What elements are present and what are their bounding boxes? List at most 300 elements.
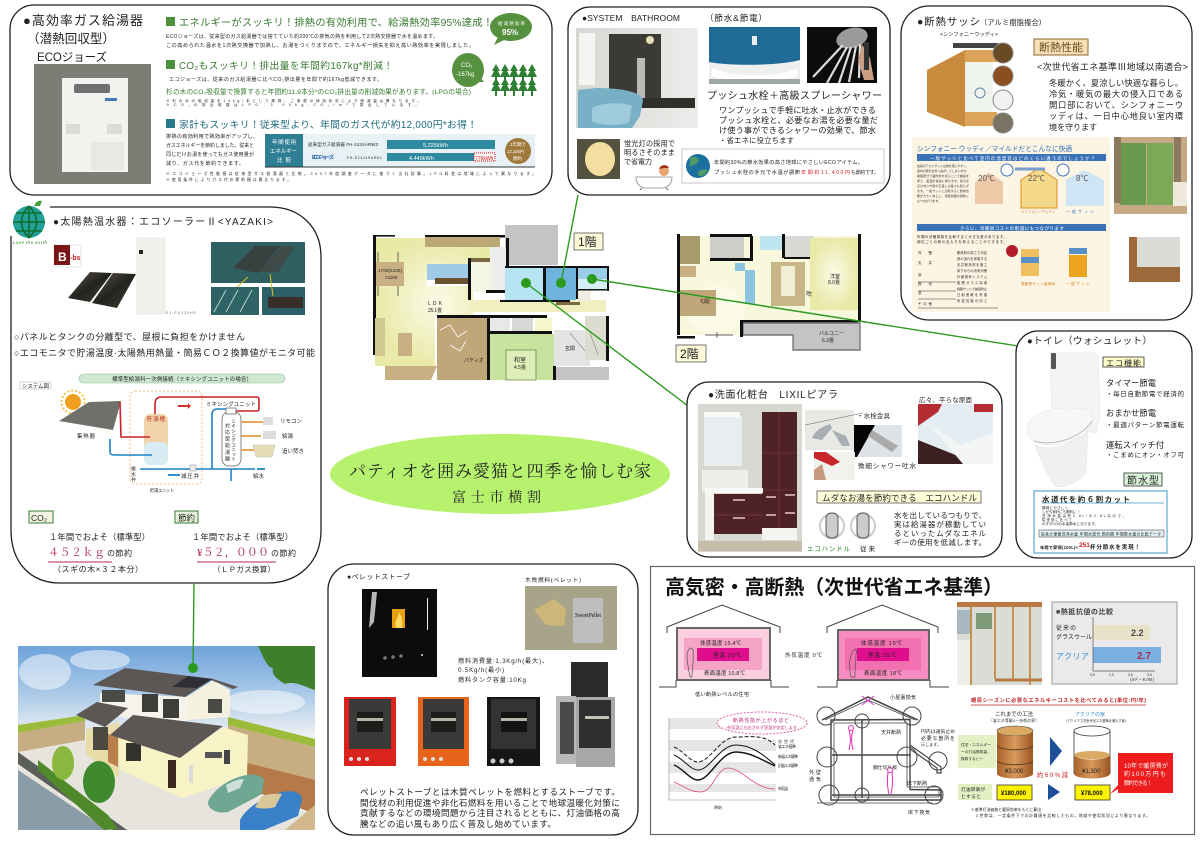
callout: CO2 savings: CO₂: [31, 513, 47, 523]
infographic: symphony woody comfort: 換気: [918, 281, 932, 286]
feature: energy efficiency: ECOジョーズは、従来型のガス給湯器では捨てていた約200℃の排気の熱を利用して2次熱交換器で水を温めます。: [166, 33, 438, 40]
label: kerosene price: とすると: [961, 794, 981, 800]
floor plan: first floor: ×1100: [385, 275, 398, 280]
photo: house rendering: [18, 646, 315, 830]
text: insulation description: ッディは、一日中心地良い室内環: [1049, 111, 1183, 121]
diagram: solar system: 集熱器: [77, 432, 95, 440]
text: eco handle description: るといったムダなエネル: [894, 528, 986, 538]
photo: bathroom interior: [576, 28, 698, 128]
feature: household savings: 同じだけお湯を使ってもガス使用量が: [166, 151, 254, 158]
callout: eco savings: プッシュ水栓の手元で水温が調節: [714, 168, 800, 176]
label: water saving type: 節水型: [1127, 474, 1159, 487]
text: fluorescent light: [624, 139, 675, 166]
diagram: high insulation house: 体感温度 19℃: [861, 639, 902, 647]
photo: toilet: [1027, 353, 1100, 487]
chart: thermal resistance comparison: ■熱抵抗値の比較: [1056, 607, 1113, 616]
photo: wood pellets: 木質燃料(ペレット): [525, 576, 581, 584]
label: first floor: [574, 233, 603, 250]
callout: cost savings: １年間でおよそ（標準型）: [192, 532, 293, 542]
chart: full oil barrel: ¥3,000: [1005, 769, 1024, 775]
diagram: solar system: システム図: [22, 383, 49, 390]
feature: household savings: [166, 118, 536, 182]
infographic: symphony woody comfort: 年間の冷暖房費を比較すると大きな差があります。: [917, 234, 1007, 239]
marker: wash room: [521, 278, 531, 288]
value: conventional cost: ¥180,000: [1001, 791, 1027, 797]
labels: section diagram: 胴仕切り板: [873, 764, 897, 771]
callout: cost savings: ¥５２，０００: [197, 547, 269, 559]
icon: mixing unit: [222, 408, 241, 466]
chart: thermal resistance comparison: 2.0: [1128, 673, 1133, 677]
text: eco handle description: [894, 510, 986, 547]
text: stove specifications: [458, 657, 548, 684]
floor plan: second floor: [677, 234, 861, 350]
text: push faucet and spray shower: け使う事ができるシャワーの効果で、節水: [719, 125, 876, 135]
diagram: solar system: 給水: [253, 472, 264, 480]
icon: collector: [59, 401, 121, 430]
heading: wash basin: ●洗面化粧台 LIXILピアラ: [708, 388, 838, 401]
label: conventional and aqua foam house: アクリアの家: [1075, 711, 1105, 718]
chart: annual energy use comparison: 5,225kWh: [423, 143, 448, 149]
diagram: solar system: [20, 374, 304, 494]
infographic: symphony woody comfort: 抑え、室温を快適に保ちます。冬の窓: [917, 178, 969, 183]
chart: indoor temperature curves: 省エネ基準: [778, 743, 796, 749]
diagram: solar system: リモコン: [280, 418, 302, 425]
icon: BL-bs certification mark: -bs: [70, 255, 81, 262]
label: water saving type: [1124, 473, 1162, 487]
text: eco handle description: 水を出しているつもりで、: [894, 510, 986, 520]
icon: mixing unit: ミキシングユニット: [231, 419, 236, 461]
labels: faucet features: 広々、平らな原面: [919, 396, 972, 404]
icons: eco handle comparison: エコハンドル: [807, 545, 850, 553]
floor plan: first floor: [373, 225, 609, 380]
label: outdoor temperature: 外気温度 0℃: [785, 651, 822, 659]
icon: BL-bs certification mark: [54, 245, 81, 267]
feature: household savings: ※使用条件によりガス代の節約額は異なります。: [166, 177, 291, 182]
text: pellet stove description: [360, 786, 620, 829]
callout: eco savings: 年間約30%の節水効果の高さ地球にやさしいECOアイテム。: [714, 158, 863, 166]
marker: toilet: [587, 274, 597, 284]
footnote: cost assumptions: １世帯は、一定条件下での計算値を比較したもの。地域や使用状況により異なります。: [975, 812, 1150, 818]
text: insulation description: 冬暖かく、夏涼しい快適な暮らし。: [1049, 78, 1183, 88]
arrows: cost reduction: [1048, 737, 1062, 800]
photo: wall-mounted water heater: [34, 64, 151, 184]
infographic: symphony woody comfort: 8℃: [1076, 174, 1088, 183]
callout: 10-year savings: 約100万円も: [1124, 770, 1166, 778]
icon: sun: [62, 390, 84, 414]
panel: toilet: [1016, 331, 1192, 558]
infographic: symphony woody comfort: 22℃: [1028, 174, 1045, 183]
feature: household savings: 排熱の有効利用で熱効率がアップし、: [166, 132, 258, 140]
value: conventional cost: [997, 785, 1032, 800]
label: eco functions: エコ機能: [1106, 358, 1141, 368]
labels: section diagram: 外壁: [809, 769, 821, 776]
callout: water savings: 251: [1079, 542, 1090, 549]
diagram: house section with insulation: [817, 696, 947, 805]
photo: push faucet bathtub: [709, 27, 800, 84]
callout: 10-year savings: 10年で暖房費が: [1124, 762, 1168, 770]
chart: annual energy use comparison: 比較: [277, 156, 291, 164]
infographic: symphony woody comfort: 窓: [918, 290, 922, 295]
chart: annual energy use comparison: 従来型ガス給湯器 FH-2424ARW3: [308, 141, 378, 148]
feature: energy efficiency: エネルギーがスッキリ！排熱の有効利用で、給湯熱効率95%達成！: [179, 16, 493, 29]
tree foliage top right: [258, 646, 315, 690]
floor plan: second floor: 吹: [806, 290, 812, 298]
labels: faucet features: ・水栓金具: [857, 411, 890, 420]
heading: gas water heater: [23, 13, 143, 64]
chart: thermal resistance comparison: 1.0: [1109, 673, 1114, 677]
callout: water savings: 環境にやさしく、: [1042, 505, 1072, 510]
diagram: low insulation house: 低い断熱レベルの住宅: [695, 690, 749, 698]
footnote: cost assumptions: [971, 807, 1150, 818]
infographic: symphony woody comfort: 天井断熱材を施工: [957, 262, 988, 267]
icon: mixing unit: 対応型給湯器: [224, 422, 230, 462]
bathroom rooms: [500, 266, 609, 305]
callout: eco savings: も節約です。: [851, 169, 879, 176]
callout: CO2 savings: の節約: [107, 548, 132, 558]
diagram: low insulation house: [659, 605, 789, 698]
infographic: symphony woody comfort: 一般サッシ: [1066, 209, 1094, 214]
feature: CO2 reduction: ※CO₂の排出係数はLPG：3.00kg-CO₂/m³で算出しています。: [166, 102, 419, 107]
labels: section diagram: 通気: [809, 776, 821, 783]
label: insulation performance: [1034, 39, 1088, 55]
text: eco function list: ・こまめにオン・オフ可: [1106, 451, 1184, 459]
infographic: symphony woody comfort: 断熱材の厚さで対応: [957, 250, 988, 255]
chart: indoor temperature curves: 断熱性能が上がるほど: [733, 717, 789, 724]
feature: household savings: 家計もスッキリ！従来型より、年間のガス代が約12,000円*お得！: [179, 118, 477, 131]
badge: CO2 -167kg: CO₂: [461, 63, 473, 69]
heading: gas water heater: ●高効率ガス給湯器: [23, 13, 143, 28]
panel: insulated window sash: [901, 6, 1192, 320]
text: solar features: ○エコモニタで貯湯温度·太陽熱用熱量・簡易ＣＯ２換算値がモニタ可能: [14, 347, 315, 358]
text: pellet stove description: 騰などの追い風もあり広く普及し始めています。: [360, 818, 556, 829]
text: fluorescent light: 蛍光灯の採用で: [624, 139, 675, 148]
infographic: symphony woody comfort: 室内の暖気を外へ逃がしてしまいます。: [917, 168, 969, 173]
callout: CO2 savings: （スギの木×３２本分）: [53, 564, 143, 574]
infographic: symphony woody comfort: 一般サッシ: [1066, 281, 1090, 286]
text: insulation description: 開口部において、シンフォニーウ: [1049, 100, 1183, 110]
labels: section diagram: 必要な箇所を: [921, 735, 955, 742]
badge: 95 percent: [490, 13, 532, 45]
chart: reduced oil barrel: ¥1,300: [1082, 769, 1101, 775]
heading: insulated sash: [917, 15, 1046, 38]
infographic: symphony woody comfort: ます。一般サッシと比較すると断熱性: [917, 188, 969, 193]
Japanese room and entry: 和室: [514, 356, 526, 364]
floor plan: second floor: バルコニー: [819, 331, 844, 337]
text: push faucet and spray shower: ワンプッシュで手軽に吐水・止水ができる: [719, 105, 876, 115]
label: annual energy consumption: 住宅・エネルギー: [961, 742, 991, 747]
text: pellet stove description: 間伐材の利用促進や非化石燃料を用いることで地球温暖化対策に: [360, 797, 620, 808]
footnote: cost assumptions: ＊基準灯油価格と暖房効率をもとに算出: [971, 807, 1041, 812]
diagram: high insulation house: 表面温度 18℃: [864, 669, 902, 677]
floor plan: second floor: 洋室: [830, 273, 840, 280]
infographic: symphony woody comfort: その他: [918, 301, 932, 306]
chart: thermal resistance comparison: 3.0: [1147, 673, 1152, 677]
heading: insulated sash: ●断熱サッシ: [917, 15, 980, 28]
label: conventional and aqua foam house: これまでの工法: [995, 710, 1034, 718]
chart: indoor temperature curves: 外気温: [778, 785, 788, 791]
text: stove specifications: 燃料タンク容量:10Kg: [458, 676, 527, 684]
chart: thermal resistance comparison: [1052, 602, 1177, 684]
icon: rows of trees: [491, 64, 537, 96]
title: concept ellipse: [330, 434, 670, 514]
infographic: symphony woody comfort: 能が大きく向上し、冷暖房費の節約に: [917, 193, 969, 198]
feature: household savings: 減り、ガス代を節約できます。: [166, 160, 244, 167]
chart: annual energy use comparison: 4,449kWh: [409, 156, 434, 162]
diagram: solar system: 標準型給湯科一次側接続（ミキシングユニットの場合）: [112, 375, 252, 383]
infographic: symphony woody comfort: さらに、冷暖房コストの削減にもつながります: [960, 225, 1064, 232]
feature: energy efficiency: [166, 13, 532, 49]
callout: cost savings: 節約: [178, 513, 195, 523]
feature: CO2 reduction: [166, 53, 537, 107]
labels: section diagram: 天井断熱: [881, 729, 901, 736]
icon: BL-bs certification mark: B: [58, 250, 67, 264]
diagram: low insulation house: 体感温度 15.4℃: [700, 639, 741, 647]
labels: section diagram: 円内は通気止め: [921, 728, 955, 735]
label: second floor: 2階: [680, 347, 699, 361]
infographic: symphony woody comfort: 樹脂部分で室内外を遮ることで結露を: [917, 173, 969, 178]
infographic: symphony woody comfort: 計画換気システム: [957, 274, 987, 279]
kitchen and utility walls: [468, 238, 606, 312]
panel: solar water heater: [11, 201, 321, 583]
infographic: symphony woody comfort: 熱の流れを抑制する: [957, 256, 987, 261]
chart: annual energy use comparison: FH-E2424SARKL: [347, 156, 382, 160]
label: second floor: [676, 345, 706, 362]
labels: faucet features: 微細シャワー吐水: [858, 461, 916, 470]
chart: thermal resistance comparison: 2.2: [1131, 628, 1144, 638]
heading: system bathroom: （節水&節電）: [705, 13, 767, 23]
label: annual energy consumption: [958, 735, 996, 768]
text: push faucet and spray shower: ・省エネに役立ちます: [719, 136, 794, 145]
heading: system bathroom: [582, 13, 767, 23]
chart: annual energy use comparison: 節約: [513, 155, 522, 162]
chart: annual energy use comparison: 1年間で: [510, 141, 527, 148]
label: annual energy consumption: 換算するとー: [961, 756, 983, 761]
chart: indoor temperature curves: 時刻: [714, 804, 722, 810]
callout: CO2 savings: ４５２ｋｇ: [48, 546, 105, 559]
chart: thermal resistance comparison: 2.7: [1137, 651, 1151, 662]
callout: water savings: わずか1/3の水量節水になります。: [1042, 521, 1098, 526]
Japanese room and entry: パティオ: [464, 358, 484, 364]
infographic: symphony woody comfort: 床: [918, 272, 922, 277]
text: fluorescent light: で省電力: [624, 157, 652, 166]
chart: thermal resistance comparison: 従来の: [1056, 624, 1076, 632]
chart: indoor temperature curves: 次世代: [778, 738, 794, 744]
feature: household savings: ※エコジョーズ性能値は従来型ガス給湯器と比較。2007年度調査データに基づく当社試算。LPG料金は地域によって異なります。: [166, 171, 536, 176]
icons: eco handle comparison: 従来: [860, 544, 876, 553]
callout: water savings: 従来品に比べて: [1042, 517, 1072, 522]
floor plan: second floor: 6.3畳: [822, 338, 834, 344]
callout: eco handle: ムダなお湯を節約できる エコハンドル: [822, 493, 977, 503]
infographic: symphony woody comfort: 樹脂サッシで結露防止: [957, 286, 987, 291]
labels: section diagram: 小屋裏換気: [890, 694, 916, 701]
panel: wash basin: [687, 382, 1002, 557]
chart: indoor temperature curves: 外気温に左右されず室温が安定します: [727, 724, 797, 731]
callout: water savings: 年間で節得(100L)×: [1040, 544, 1079, 551]
text: solar features: [14, 331, 315, 358]
labels: section diagram: 示します。: [921, 742, 941, 747]
callout: water savings: 水道代を約６割カット: [1042, 494, 1130, 504]
heading: pellet stove: ●ペレットストーブ: [347, 572, 410, 581]
callout: water savings: 洗浄水量は約3.8L/小2.8Lなので、: [1042, 513, 1126, 518]
floor plan: first floor: LDK: [428, 301, 443, 307]
callout: cost savings: の節約: [271, 548, 296, 558]
panel: system bathroom: [568, 7, 890, 195]
label: 60 percent reduction: 約60%減: [1037, 770, 1068, 779]
diagram: solar system: ミキシングユニット: [206, 400, 256, 408]
chart: indoor temperature curves: [669, 712, 807, 810]
labels: faucet features: [857, 396, 972, 470]
text: eco function list: 運転スイッチ付: [1106, 440, 1164, 450]
photo: ceiling light: [577, 139, 620, 179]
text: insulation description: 冷気・暖気の最大の侵入口である: [1049, 89, 1183, 99]
text: insulation description: 境を守ります: [1049, 122, 1097, 132]
diagram: solar system: 減圧弁: [181, 472, 199, 480]
infographic: symphony woody comfort: 複層ガラス採用: [957, 280, 987, 285]
label: conventional and aqua foam house: [989, 710, 1128, 723]
text: solar features: ○パネルとタンクの分離型で、屋根に負担をかけません: [14, 331, 245, 342]
icon: person in bathtub: [636, 165, 672, 190]
badge: 95 percent: 95%: [502, 28, 518, 37]
heading: toilet: ●トイレ（ウォシュレット）: [1027, 335, 1152, 347]
callout: eco savings: 年間約11,400円: [801, 168, 850, 176]
cars: [208, 775, 302, 830]
connector: solar panel to house: [188, 583, 198, 673]
label: kerosene price: [958, 784, 992, 800]
photo: red stove: [344, 697, 396, 766]
photo: wood pellets: [525, 576, 617, 650]
photos: faucet details: [805, 404, 993, 480]
callout: 10-year savings: 節約できる！: [1124, 779, 1152, 787]
infographic: symphony woody comfort: もつながります。: [917, 198, 941, 203]
infographic: symphony woody comfort: 一般サッシと比べて室内の温度差はどのくらい違うのでしょうか？: [930, 155, 1095, 162]
garden trees: [38, 746, 118, 830]
diagram: high insulation house: [817, 605, 949, 687]
icon: storage tank: 貯湯槽: [147, 415, 165, 423]
infographic: symphony woody comfort: 天井: [918, 260, 932, 265]
title: concept ellipse: パティオを囲み愛猫と四季を愉しむ家: [349, 462, 651, 481]
heading: gas water heater: ECOジョーズ: [37, 50, 107, 64]
badge: CO2 -167kg: [452, 53, 484, 87]
heading: insulated sash: （アルミ樹脂複合）: [980, 18, 1046, 27]
infographic: symphony woody comfort: 辺の寒さや夏の日差しの暑さも和らぎ: [917, 183, 969, 188]
chart: annual energy use comparison: ECOジョーズ: [312, 154, 334, 161]
infographic: symphony woody comfort: 日射遮蔽を考慮: [957, 292, 988, 297]
infographic: symphony woody comfort: 従来のアルミサッシは熱を通しやすく、: [917, 163, 969, 168]
diagram: solar system: 排水弁: [130, 465, 136, 483]
house body: [76, 668, 248, 798]
floor plan: second floor: 勾配: [700, 298, 710, 305]
photo: solar panels and tank: EJ-PU220HP: [166, 311, 197, 315]
chart: annual energy use comparison: 年間使用: [272, 138, 296, 146]
infographic: symphony woody comfort: [912, 137, 1110, 312]
photo: insulation installed in wall: [957, 602, 1042, 685]
Japanese room and entry: [385, 315, 609, 380]
diagram: high insulation house: 室温 20℃: [868, 651, 896, 659]
chart: annual energy use comparison: 12,106円: [507, 149, 524, 155]
infographic: symphony woody comfort: シンフォニーウッディ: [1021, 209, 1055, 214]
title: concept ellipse: 富士市横割: [452, 489, 541, 506]
panel: high airtightness and insulation: [650, 566, 1194, 834]
text: push faucet and spray shower: プッシュ水栓と、必要なお湯を必要な量だ: [719, 115, 878, 125]
infographic: symphony woody comfort: 外壁: [918, 250, 932, 255]
callout: eco savings: [682, 149, 884, 183]
callout: water savings: [1034, 491, 1167, 553]
text: pellet stove description: 貢献するなどの環境問題から注目されるとともに、灯油価格の高: [360, 807, 620, 818]
chart: thermal resistance comparison: 0.0: [1090, 673, 1095, 677]
labels: section diagram: [809, 694, 955, 816]
photo: panels on roof: [211, 242, 305, 315]
infographic: symphony woody comfort: 20℃: [978, 174, 995, 183]
infographic: symphony woody comfort: 床下からの冷気対策: [957, 268, 988, 273]
illustration: sash cross-section: [927, 43, 1013, 133]
floor plan: first floor: 1700(2230): [378, 268, 402, 273]
photo: vanity unit: [698, 404, 802, 552]
label: conventional and aqua foam house: （アクリアで次世代省エネ基準を満たす家）: [1064, 718, 1128, 723]
diagram: low insulation house: 室温 20℃: [713, 651, 741, 659]
chart: annual energy use comparison: エネルギー: [270, 148, 297, 155]
text: fluorescent light: 明るさそのまま: [624, 148, 675, 157]
chart: indoor temperature curves: 旧省エネ基準: [778, 762, 798, 768]
photo: solar panels and tank: [68, 238, 197, 315]
floor plan: first floor: 25.1畳: [428, 308, 442, 314]
heading: gas water heater: （潜熱回収型）: [27, 32, 115, 46]
text: pellet stove description: ペレットストーブとは木質ペレットを燃料とするストーブです。: [360, 786, 620, 797]
value: reduced cost: ¥78,000: [1081, 791, 1103, 797]
chart: full oil barrel: [997, 726, 1033, 778]
text: insulation description: <次世代省エネ基準Ⅲ地域以南適合>: [1037, 61, 1188, 72]
icons: eco handle comparison: [807, 513, 876, 553]
heading: solar water heater: ●太陽熱温水器：エコソーラーⅡ<YAZAKI>: [53, 215, 273, 228]
photo: window frame corner: [1129, 237, 1180, 282]
infographic: symphony woody comfort: 気密性能の向上: [957, 298, 988, 303]
chart: thermal resistance comparison: アクリア: [1056, 652, 1089, 661]
chart: thermal resistance comparison: グラスウール: [1056, 633, 1092, 641]
text: eco handle description: ギーの使用を低減します。: [894, 537, 986, 547]
feature: household savings: ガスエネルギーを節約しました。従来と: [166, 142, 254, 149]
icon: storage tank: [144, 414, 168, 465]
floor plan: second floor: 8.0畳: [828, 280, 840, 286]
photo: open stove: [556, 662, 615, 767]
callout: cost savings: （ＬＰガス換算）: [213, 564, 275, 574]
diagram: solar system: 貯湯ユニット: [150, 487, 174, 494]
text: stove specifications: 0.5Kg/h(最小): [458, 666, 504, 674]
diagram: solar system: 給湯: [282, 432, 293, 440]
callout: CO2 savings: [29, 511, 150, 574]
badge: 95 percent: 給湯熱効率: [498, 20, 526, 27]
text: eco function list: ・最適パターン節電運転: [1106, 420, 1184, 429]
heading: insulated sash: <シンフォニーウッディ>: [940, 30, 998, 38]
chart: annual energy use comparison: [265, 134, 535, 167]
infographic: symphony woody comfort: 高断熱サッシ使用時: [1021, 281, 1055, 286]
feature: CO2 reduction: ※杉の木の吸収量を14kg/本として換算。ご家庭の使用状況により削減量は異なります。: [166, 98, 421, 103]
chart: reduced oil barrel: [1074, 726, 1110, 778]
infographic: symphony woody comfort: シンフォニー ウッディ／マイルドだとこんなに快適: [917, 144, 1072, 153]
label: insulation performance: 断熱性能: [1039, 40, 1083, 54]
heading: airtightness: 高気密・高断熱（次世代省エネ基準）: [665, 576, 1003, 599]
icon: love the earth globe: Love the earth: [13, 240, 47, 245]
Japanese room and entry: 4.5畳: [514, 365, 526, 371]
text: push faucet and spray shower: プッシュ水栓＋高級スプレーシャワー: [707, 89, 882, 102]
text: stove specifications: 燃料消費量:1.3Kg/h(最大)、: [458, 657, 548, 665]
feature: CO2 reduction: 杉の木のCO₂吸収量で換算すると年間約11.9本分*のCO₂排出量の削減効果があります。(LPGの場合): [166, 87, 471, 96]
connectors: floor plan to equipment panels: [521, 195, 1018, 406]
marker: bathroom: [556, 278, 566, 288]
diagram: low insulation house: 表面温度 10.8℃: [704, 669, 745, 677]
text: insulation description: [1037, 61, 1188, 132]
text: eco function list: [1106, 378, 1184, 459]
feature: CO2 reduction: エコジョーズは、従来のガス給湯器に比べCO₂排出量を年間で約167kg低減できます。: [169, 76, 382, 83]
photo: living room window: [1114, 137, 1187, 214]
